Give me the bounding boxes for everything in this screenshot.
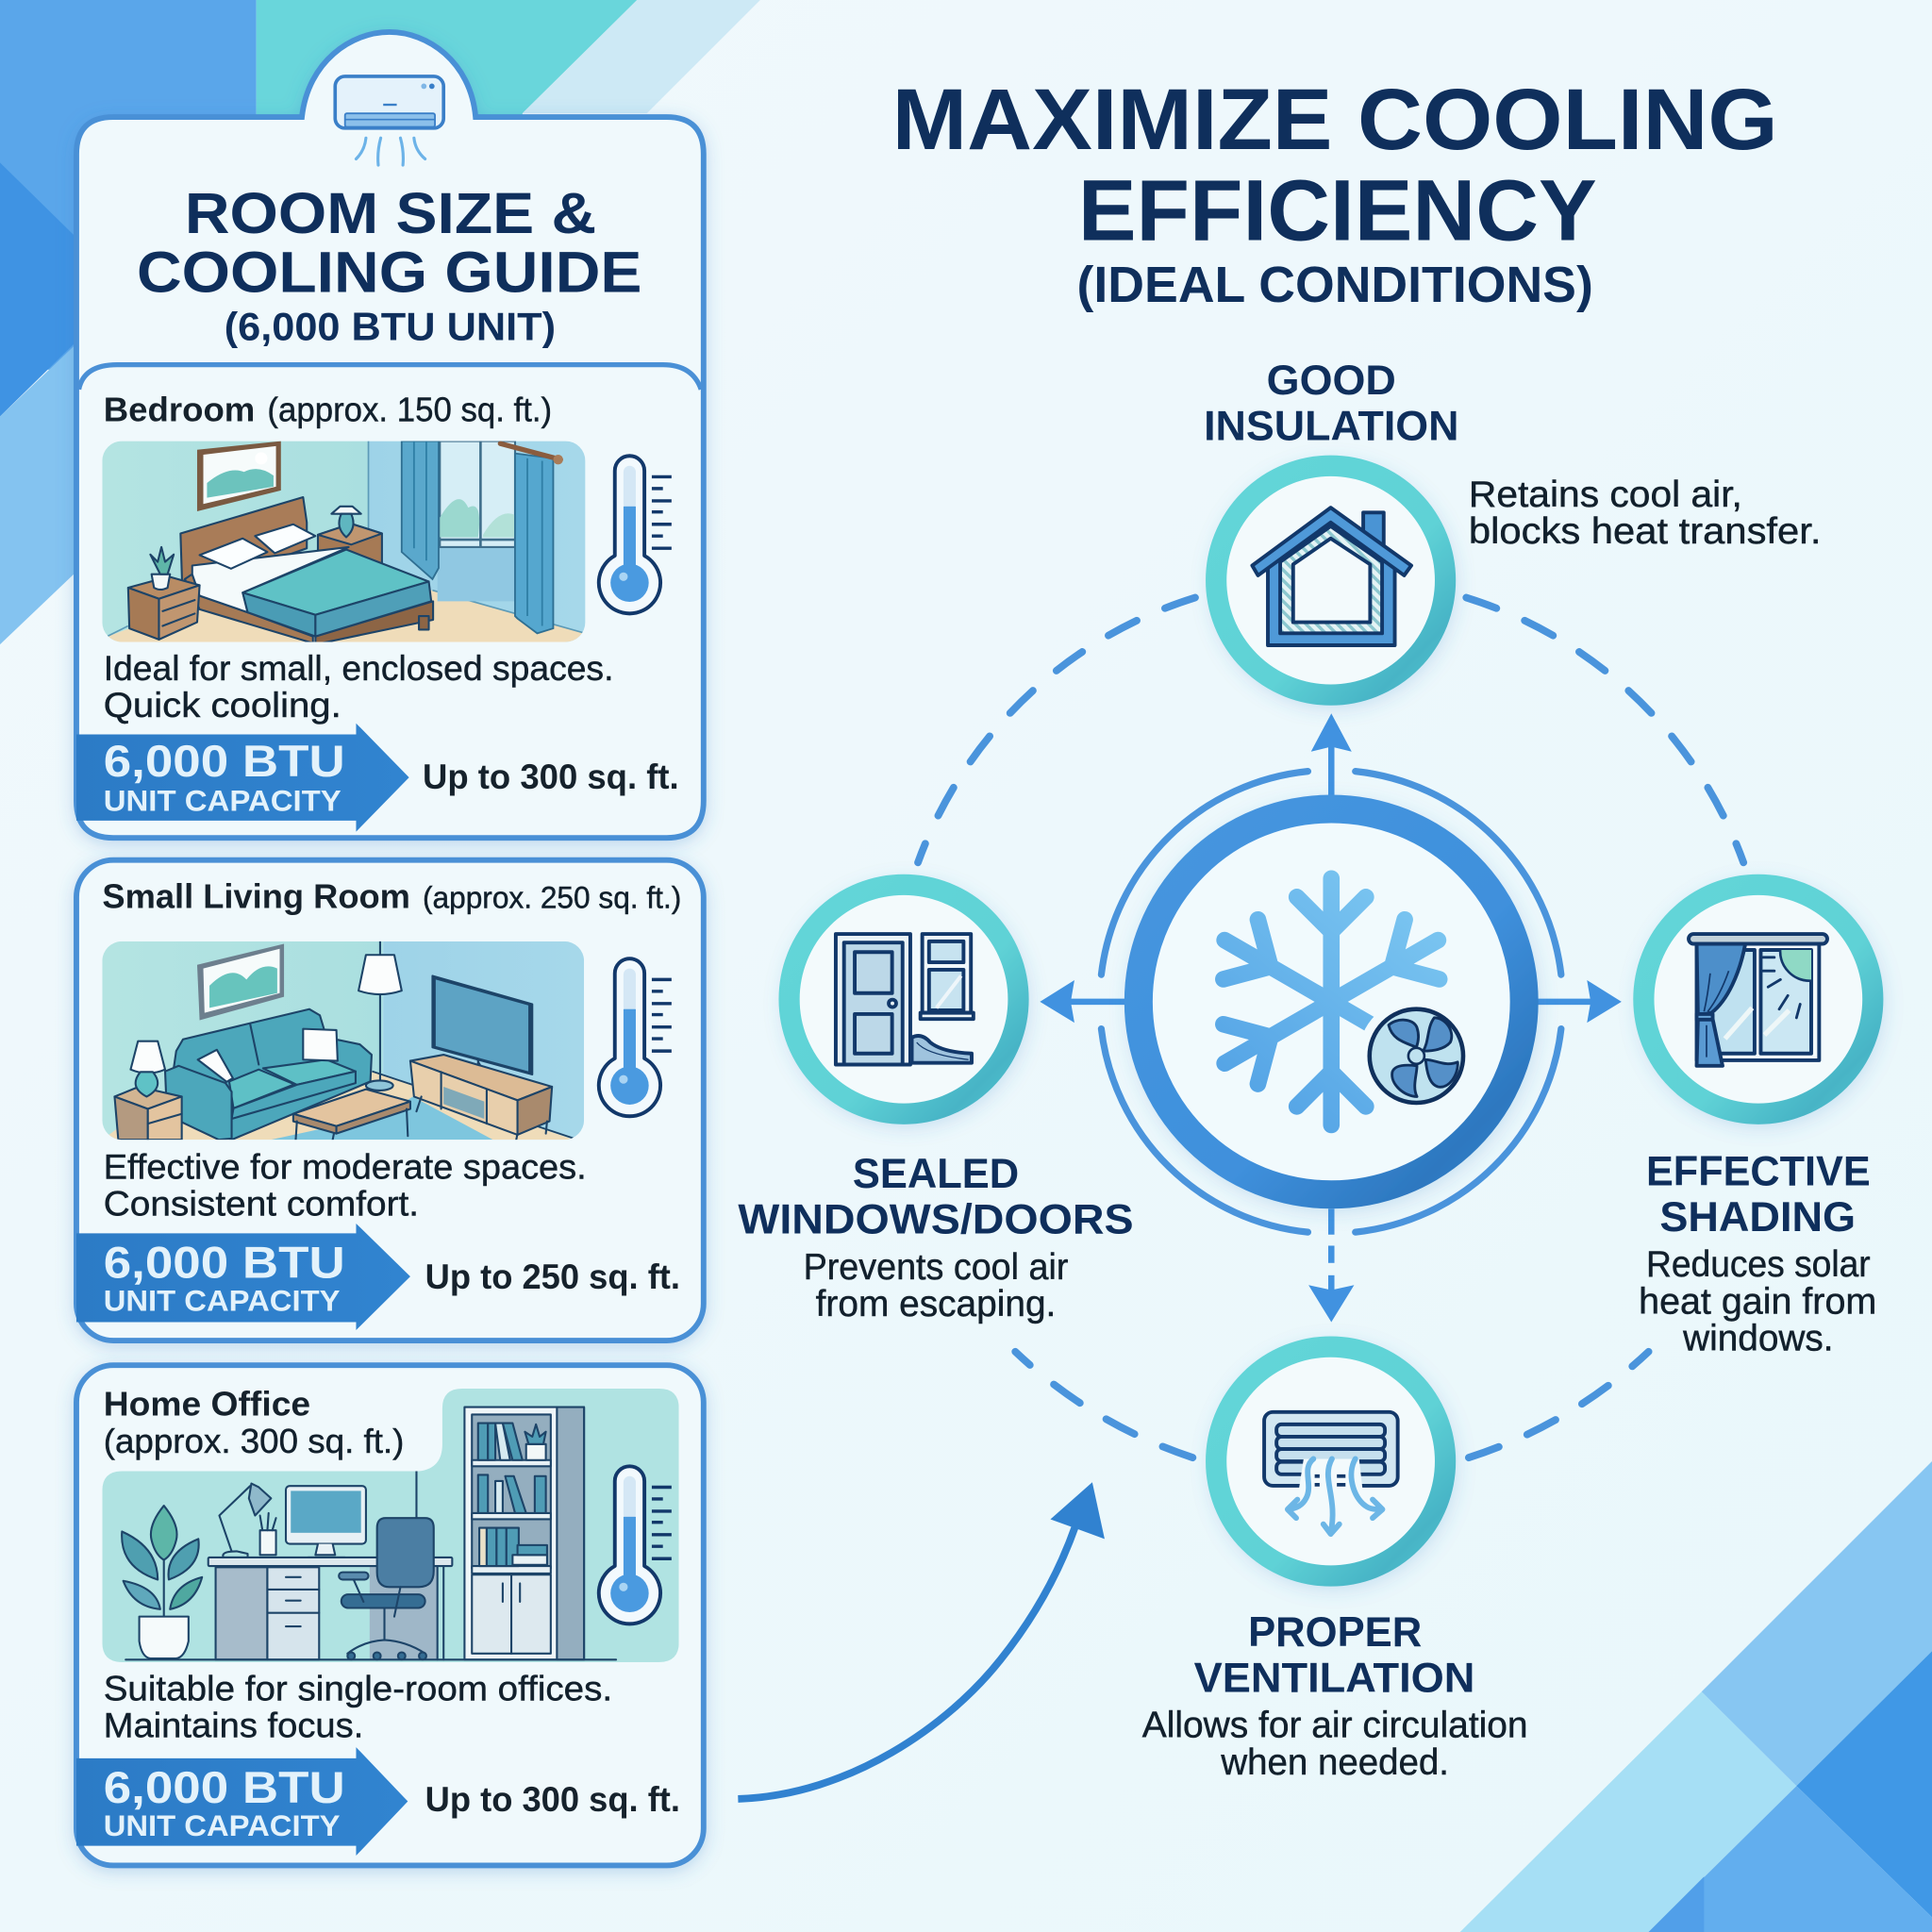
capacity arrow: home office: 6,000 BTU	[104, 1762, 345, 1812]
icon: fan	[1358, 998, 1474, 1114]
description	[1142, 1706, 1528, 1783]
description: living room	[104, 1146, 587, 1223]
room label: home office	[104, 1385, 404, 1460]
description: living room: Effective for moderate spaces.	[104, 1146, 587, 1186]
icon: thermometer	[599, 456, 672, 613]
title: maximize cooling efficiency: EFFICIENCY	[1078, 163, 1597, 259]
ring	[1216, 1347, 1445, 1576]
icon: thermometer	[599, 958, 672, 1116]
room label: home office: Home Office	[104, 1385, 310, 1424]
dashed connecting ring	[918, 597, 1743, 1457]
capacity arrow: home office	[76, 1747, 408, 1856]
node: proper ventilation	[1142, 1347, 1528, 1783]
title: maximize cooling efficiency: MAXIMIZE COOLING	[892, 72, 1778, 168]
arrow: up to insulation	[1311, 713, 1352, 798]
node: good insulation	[1204, 358, 1821, 695]
description: bedroom: Ideal for small, enclosed spaces.	[104, 648, 613, 688]
description: living room: Consistent comfort.	[104, 1183, 419, 1223]
heading: room size and cooling guide: COOLING GUIDE	[137, 241, 641, 306]
coverage: up to 300 sq. ft.: Up to 300 sq. ft.	[423, 757, 679, 796]
panel: home office	[76, 1365, 704, 1865]
arrow: curved link from guide to efficiency diagram	[738, 1482, 1105, 1799]
room label: bedroom	[104, 391, 552, 429]
room label: home office: (approx. 300 sq. ft.)	[104, 1422, 404, 1460]
description	[1639, 1244, 1876, 1359]
heading: room size and cooling guide: ROOM SIZE &	[185, 181, 596, 246]
capacity arrow: bedroom: 6,000 BTU	[104, 736, 345, 786]
capacity arrow: living room	[76, 1224, 410, 1330]
icon: vent with airflow	[1264, 1412, 1398, 1534]
label: EFFECTIVE	[1646, 1148, 1871, 1194]
label: PROPER	[1248, 1609, 1422, 1656]
description: blocks heat transfer.	[1469, 511, 1821, 552]
illustration: living room	[102, 941, 584, 1146]
description: Retains cool air,	[1469, 475, 1742, 515]
capacity arrow: living room: UNIT CAPACITY	[104, 1285, 341, 1318]
label: VENTILATION	[1194, 1655, 1474, 1701]
description: bedroom: Quick cooling.	[104, 685, 341, 724]
arrow: down to ventilation	[1308, 1208, 1354, 1322]
card divider: bedroom card top	[79, 365, 701, 390]
illustration: home office	[102, 1389, 679, 1662]
icon: thermometer	[599, 1466, 672, 1624]
label: WINDOWS/DOORS	[738, 1196, 1134, 1242]
room label: small living room: Small Living Room	[102, 877, 410, 916]
capacity arrow: bedroom	[76, 724, 409, 832]
panel outline with arch	[76, 32, 704, 838]
description	[804, 1247, 1069, 1324]
room label: small living room	[102, 877, 681, 916]
panel: room size and cooling guide, bedroom	[76, 32, 704, 838]
label: SEALED	[853, 1151, 1019, 1197]
capacity arrow: living room: 6,000 BTU	[104, 1237, 345, 1287]
capacity arrow: bedroom: UNIT CAPACITY	[104, 784, 341, 817]
coverage: up to 250 sq. ft.: Up to 250 sq. ft.	[425, 1257, 680, 1296]
description	[1469, 475, 1821, 552]
capacity arrow: home office: UNIT CAPACITY	[104, 1809, 341, 1842]
panel: small living room	[76, 860, 704, 1341]
heading: room size and cooling guide	[137, 181, 641, 348]
icon: snowflake	[1224, 878, 1440, 1124]
description: heat gain from	[1639, 1281, 1876, 1322]
label: INSULATION	[1204, 403, 1458, 449]
label	[1204, 358, 1458, 449]
icon: house	[1252, 508, 1411, 645]
title: maximize cooling efficiency	[892, 72, 1778, 313]
description: from escaping.	[816, 1284, 1056, 1324]
node: effective shading	[1639, 885, 1876, 1359]
outer arcs	[1101, 772, 1561, 1232]
description: home office: Maintains focus.	[104, 1706, 363, 1745]
label	[1646, 1148, 1871, 1241]
decorative background shapes: top left	[0, 0, 760, 644]
central emblem: snowflake and fan	[1040, 713, 1622, 1322]
description: Allows for air circulation	[1142, 1706, 1528, 1746]
description: bedroom	[104, 648, 613, 724]
thick ring	[1139, 808, 1524, 1194]
description: home office	[104, 1668, 612, 1745]
icon: air conditioner	[335, 76, 443, 165]
icon: window with curtain	[1687, 932, 1829, 1068]
ring	[790, 885, 1019, 1114]
arrow: left to sealed windows	[1040, 980, 1126, 1023]
card outline	[76, 1365, 704, 1865]
ring	[1216, 466, 1445, 695]
label	[738, 1151, 1134, 1242]
ring	[1643, 885, 1873, 1114]
description: when needed.	[1220, 1742, 1449, 1783]
illustration: bedroom	[102, 441, 585, 644]
label: SHADING	[1659, 1194, 1856, 1241]
description: windows.	[1682, 1319, 1834, 1359]
room label: bedroom: Bedroom	[104, 391, 255, 429]
description: home office: Suitable for single-room offices.	[104, 1668, 612, 1707]
title: maximize cooling efficiency: (IDEAL CONDITIONS)	[1077, 258, 1593, 313]
label: GOOD	[1267, 358, 1396, 404]
card outline	[76, 860, 704, 1341]
room label: bedroom: (approx. 150 sq. ft.)	[267, 391, 552, 429]
heading: room size and cooling guide: (6,000 BTU UNIT)	[225, 304, 556, 348]
room label: small living room: (approx. 250 sq. ft.)	[423, 880, 681, 915]
description: Reduces solar	[1646, 1244, 1871, 1285]
decorative background shapes: bottom right	[1460, 1461, 1932, 1932]
icon: door and window	[836, 934, 974, 1064]
description: Prevents cool air	[804, 1247, 1069, 1288]
label	[1194, 1609, 1474, 1701]
coverage: up to 300 sq. ft.: Up to 300 sq. ft.	[425, 1779, 680, 1819]
node: sealed windows and doors	[738, 885, 1134, 1324]
arrow: right to shading	[1537, 980, 1622, 1023]
